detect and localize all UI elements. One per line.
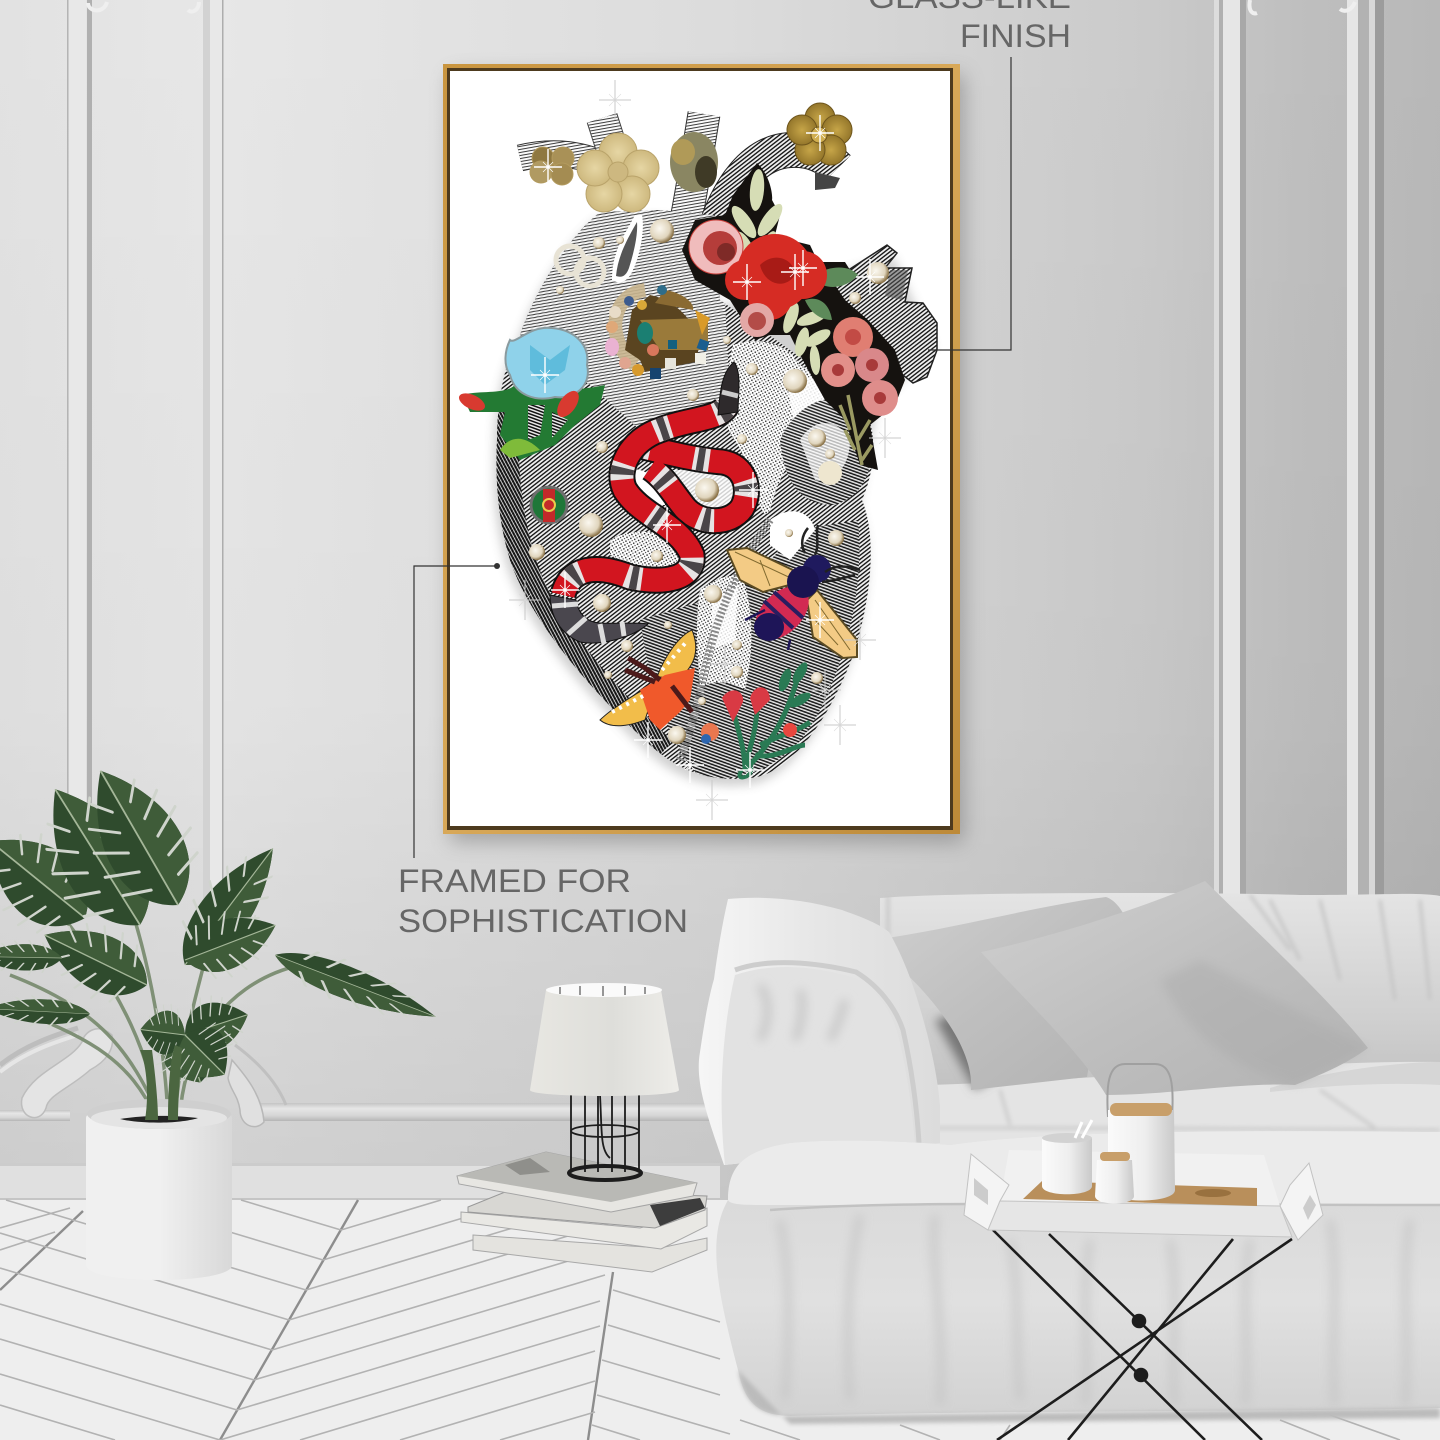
framed artwork <box>443 64 964 842</box>
lower-left dark stippled edge <box>500 410 660 755</box>
lower heart hatching <box>640 520 859 779</box>
embroidered flowers bottom <box>701 660 813 777</box>
sparkles <box>509 80 901 820</box>
white and stippled regions <box>610 341 872 690</box>
snake head <box>718 362 739 415</box>
frame shadow <box>450 74 964 842</box>
gold frame <box>443 64 960 834</box>
coral snake <box>550 362 746 644</box>
snake rear coil <box>635 445 746 521</box>
floor <box>0 1200 1440 1440</box>
lamp cage <box>569 1094 641 1180</box>
heart illustration <box>456 80 937 820</box>
sofa arm <box>699 898 940 1165</box>
callout label: framed for sophistication <box>398 863 688 939</box>
seat cushions <box>930 1062 1440 1200</box>
blue rose with green stems <box>456 328 605 460</box>
callout label: glass-like finish <box>868 0 1071 54</box>
callout label: glass-like finish: FINISH <box>960 18 1071 54</box>
snake body <box>563 405 727 595</box>
rose patch <box>682 163 905 470</box>
tray table <box>964 1064 1323 1440</box>
sofa front <box>716 1131 1440 1424</box>
ceramic cup <box>1042 1120 1092 1194</box>
lamp shade <box>530 990 679 1096</box>
small jar <box>1095 1152 1134 1204</box>
table lamp <box>530 983 679 1180</box>
planter pot <box>86 1045 232 1280</box>
throw pillows <box>867 881 1368 1095</box>
dark slit and GG outline <box>556 215 643 286</box>
jewelled brooch <box>605 285 710 379</box>
heart body <box>496 210 873 779</box>
clipped engraving zones <box>500 210 872 779</box>
gold flowers and lion <box>530 103 852 212</box>
sofa <box>699 881 1440 1424</box>
baseboard <box>0 1163 720 1201</box>
vessels <box>520 114 937 383</box>
gg emblem button <box>531 487 567 523</box>
table legs <box>993 1230 1292 1440</box>
snake tail <box>550 595 648 644</box>
coronary vessel <box>680 520 770 760</box>
books stack <box>457 1152 707 1272</box>
potted monstera plant <box>0 746 443 1280</box>
heart shadow <box>493 217 934 786</box>
plant leaves <box>0 746 443 1099</box>
callout: glass-like finish leader <box>928 57 1011 350</box>
white canvas <box>450 71 950 826</box>
pearls and crystals <box>529 219 889 744</box>
frame inner edge <box>447 68 953 830</box>
callout label: framed for sophistication: SOPHISTICATION <box>398 903 688 939</box>
sofa back seams <box>888 895 1430 1000</box>
sofa back <box>880 893 1440 1110</box>
jar with bamboo lid <box>1107 1064 1175 1200</box>
bee <box>727 525 860 658</box>
tray <box>964 1150 1323 1240</box>
callout: framed leader <box>414 563 500 858</box>
callout label: framed for sophistication: FRAMED FOR <box>398 863 631 899</box>
moth <box>600 630 696 730</box>
plant stems <box>10 890 300 1118</box>
upper atrium lighter engraving <box>520 210 730 430</box>
wall mouldings <box>0 0 1384 1127</box>
